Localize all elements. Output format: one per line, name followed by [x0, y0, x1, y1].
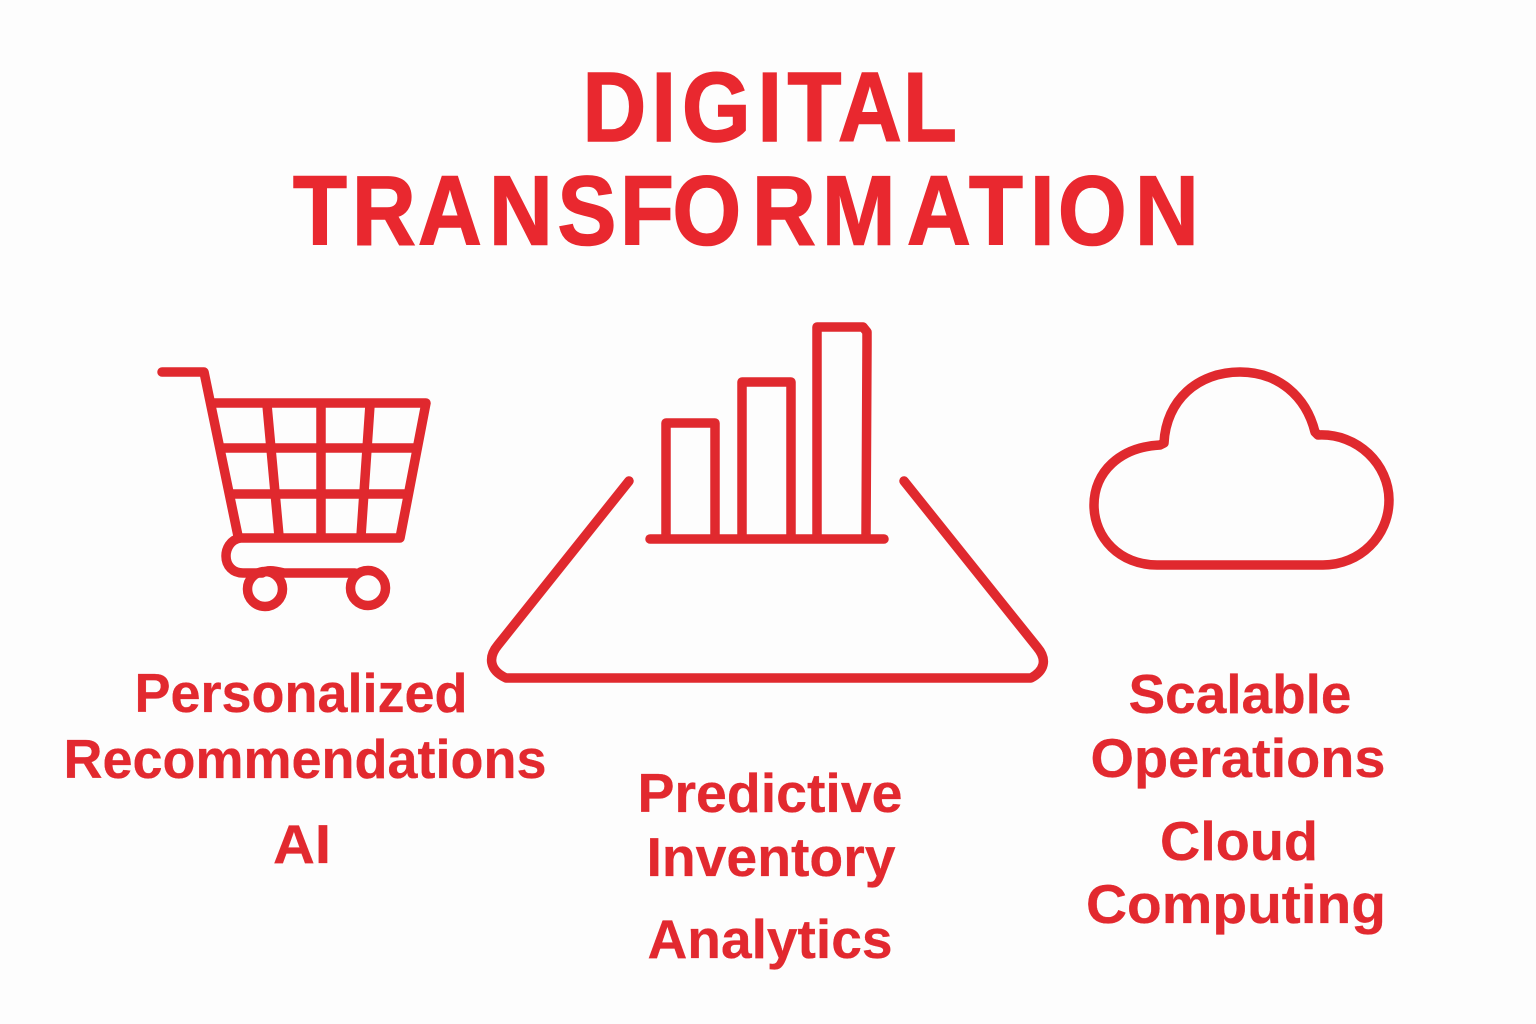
label: center column: Inventory	[646, 826, 896, 888]
label: right column: Scalable	[1128, 663, 1352, 725]
label: right column	[1086, 663, 1386, 935]
label: left column: Recommendations	[64, 728, 546, 790]
label: right column: Computing	[1086, 873, 1386, 935]
label: right column: Cloud	[1160, 810, 1318, 872]
label: left column	[64, 662, 546, 875]
icon: shopping cart	[162, 372, 426, 606]
label: center column	[638, 762, 902, 970]
icon: cloud	[1094, 372, 1389, 565]
title: TRANSFORMATION	[293, 156, 1199, 266]
label: left column: Personalized	[134, 662, 468, 724]
label: center column: Predictive	[638, 762, 902, 824]
label: left column: AI	[273, 813, 331, 875]
title	[293, 53, 1199, 266]
title: DIGITAL	[582, 53, 957, 162]
label: center column: Analytics	[648, 908, 892, 970]
icon: bar chart on triangle	[492, 327, 1043, 678]
label: right column: Operations	[1090, 727, 1386, 789]
